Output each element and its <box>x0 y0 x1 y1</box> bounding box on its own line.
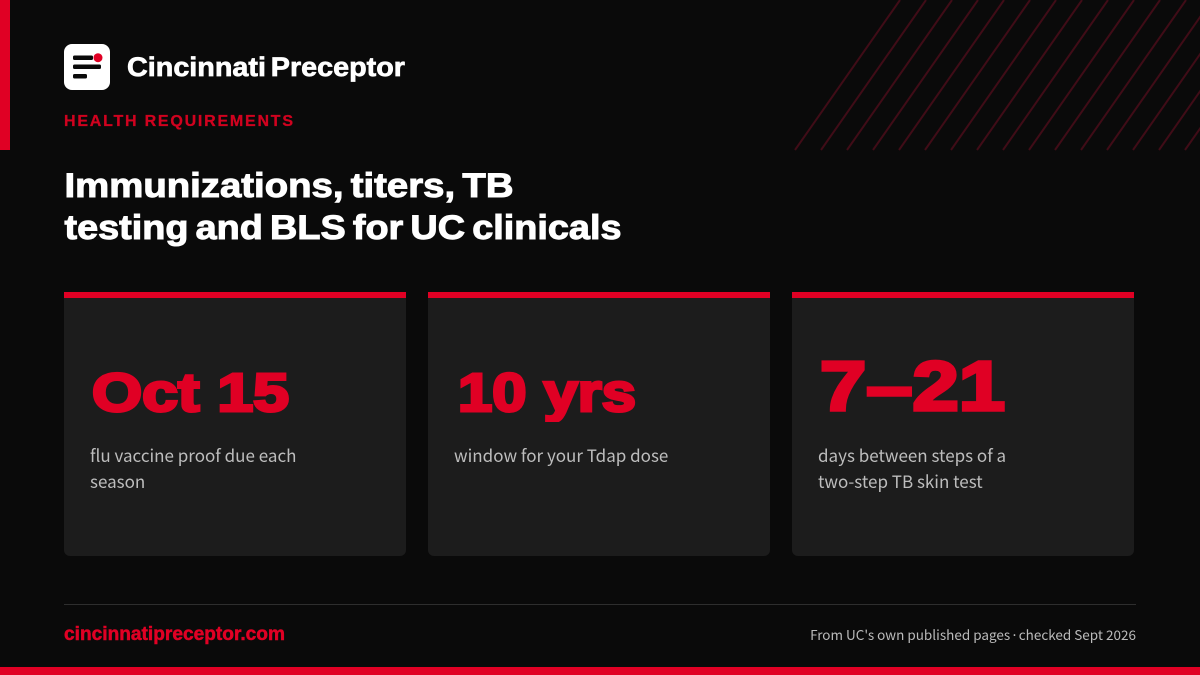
bottom accent bar <box>0 667 1200 675</box>
panel: TB test stat <box>792 292 1134 556</box>
footer website: cincinnatipreceptor.com <box>64 624 285 645</box>
label: Tdap: window for your Tdap dose <box>454 442 668 467</box>
label: TB test <box>818 442 1006 493</box>
title: Immunizations, titers, TB <box>64 167 514 205</box>
eyebrow label: HEALTH REQUIREMENTS <box>64 113 293 130</box>
label: flu vaccine: season <box>90 468 145 493</box>
panel: Tdap stat <box>428 292 770 556</box>
title <box>64 167 622 247</box>
stat: Oct 15: Oct 15 <box>92 363 289 422</box>
label: TB test: days between steps of a <box>818 442 1006 467</box>
panel: flu vaccine stat <box>64 292 406 556</box>
stat: 10 yrs: 10 yrs <box>458 363 636 422</box>
label: flu vaccine <box>90 442 296 493</box>
left accent bar <box>0 0 10 150</box>
title: testing and BLS for UC clinicals <box>64 209 622 247</box>
label: TB test: two-step TB skin test <box>818 468 983 493</box>
footer source note: From UC's own published pages·checked Sept 2026 <box>810 624 1136 644</box>
logo icon <box>64 44 110 90</box>
brand name: Cincinnati Preceptor <box>127 52 406 82</box>
label: flu vaccine: flu vaccine proof due each <box>90 442 296 467</box>
